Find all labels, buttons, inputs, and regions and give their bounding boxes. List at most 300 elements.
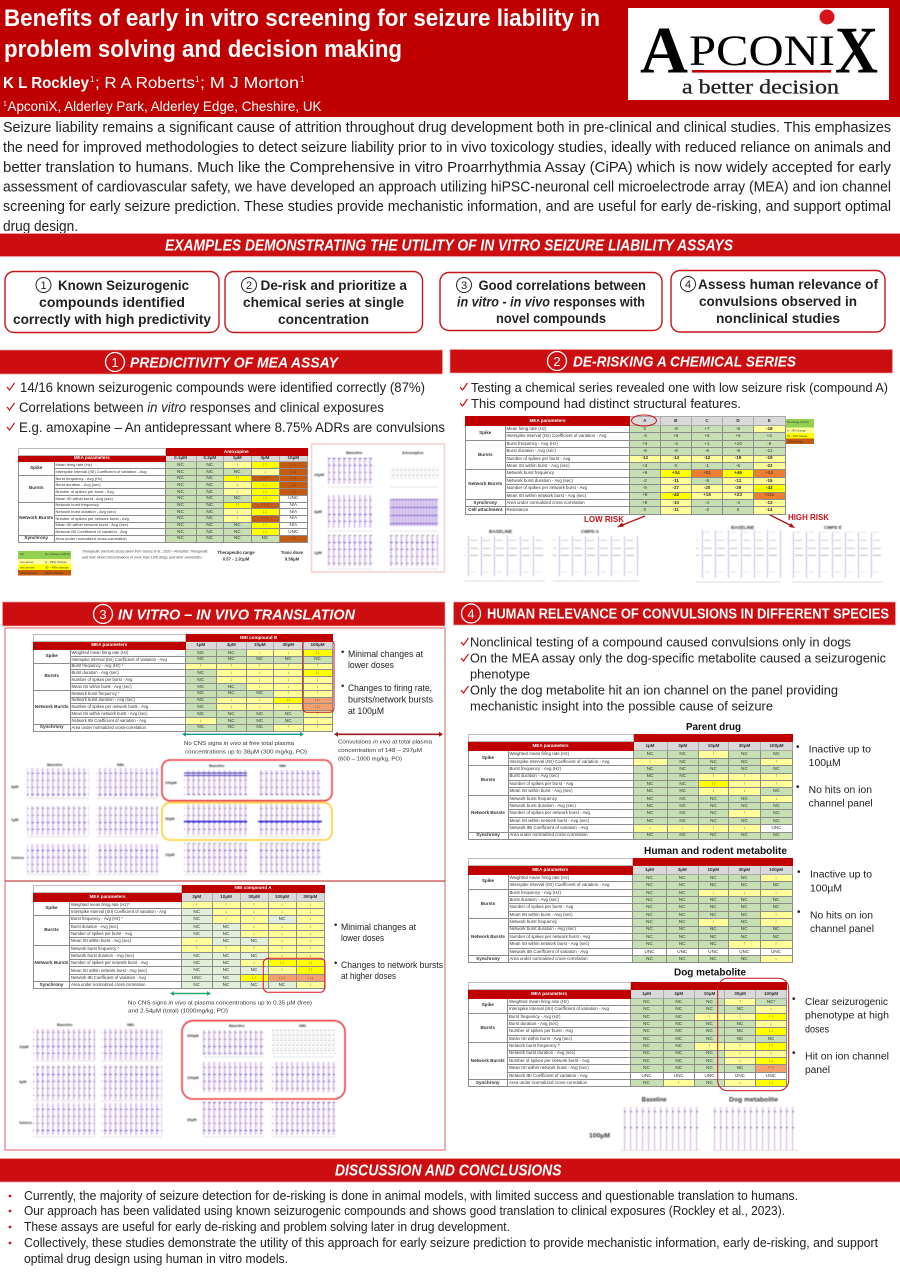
table: dog metabolite: NC: [643, 1065, 650, 1070]
table: NBI compound A: Weighted mean firing rate (Hz)*: [71, 902, 130, 907]
table: chemical series: E: [768, 418, 771, 423]
table: NBI compound A: Network burst duration - Avg (sec): [71, 953, 134, 958]
table: dog metabolite: ↓↓: [769, 1058, 773, 1063]
table: parent drug: NC: [679, 810, 686, 815]
table: NBI compound B: Interspike Interval (ISI) Coefficient of variation - Avg: [72, 657, 167, 662]
callout: dog metabolite high doses: [718, 978, 789, 1091]
raster plots: amoxapine: 1µM: [314, 550, 323, 555]
table: dog metabolite: 30µM: [734, 991, 746, 996]
table: dog metabolite: Interspike Interval (ISI) Coefficient of variation - Avg: [509, 1006, 609, 1011]
table: parent drug: Mean ISI within network burst - Avg (sec): [510, 818, 589, 823]
table: dog metabolite: ↓: [770, 1021, 772, 1026]
table: dog metabolite: ↑↑: [769, 1014, 773, 1019]
bullets: dog metabolite: •: [792, 1048, 796, 1059]
table: chemical series: B: [674, 418, 677, 423]
table: amoxapine MEA parameters: ↓↓: [263, 495, 267, 500]
table: NBI compound B: ↓↓: [315, 650, 320, 655]
raster plots: amoxapine: [312, 444, 444, 572]
table: amoxapine MEA parameters: NC: [177, 529, 184, 534]
table: NBI compound A: ↓↓: [252, 975, 256, 980]
table: NBI compound B: ↑: [316, 724, 319, 729]
table: NBI compound B: ↓↓↓: [314, 704, 321, 709]
table: human and rodent metabolite: 10µM: [707, 867, 719, 872]
table: dog metabolite: NC: [643, 1021, 650, 1026]
table: amoxapine MEA parameters: ↑↑: [235, 475, 240, 480]
table: amoxapine MEA parameters: NC: [262, 535, 268, 540]
table: amoxapine MEA parameters: 1µM: [233, 455, 242, 460]
table: chemical series: Synchrony: [473, 500, 497, 505]
table: amoxapine MEA parameters: ↑↑↑: [262, 475, 268, 480]
table: human and rodent metabolite: NC: [710, 934, 717, 939]
table: amoxapine MEA parameters: Amoxapine: [224, 449, 249, 454]
table: amoxapine MEA parameters: ↓↓: [263, 482, 267, 487]
table: human and rodent metabolite: NC: [741, 912, 748, 917]
authors: K L Rockley: [3, 75, 89, 92]
table: NBI compound A: 300µM: [303, 894, 317, 898]
table: NBI compound A: NC: [223, 967, 229, 972]
table: amoxapine MEA parameters: Interspike Interval (ISI) Coefficient of variation - Avg: [56, 469, 147, 474]
panel 4: human relevance of convulsions: [454, 602, 896, 1150]
table: dog metabolite: ↑: [739, 1043, 741, 1048]
table: parent drug: NC: [679, 818, 686, 823]
heading: discussion and conclusions: DISCUSSION AND CONCLUSIONS: [335, 1162, 562, 1180]
table: human and rodent metabolite: NC: [741, 956, 748, 961]
table: chemical series: +5: [673, 433, 678, 438]
table: parent drug: NC: [679, 796, 686, 801]
table: NBI compound A: ↓: [253, 924, 255, 929]
bullet list 1: 14/16 known seizurogenic compounds were identified correctly (87%): [20, 380, 425, 395]
table: dog metabolite: ↓: [770, 1050, 772, 1055]
table: NBI compound A: NC: [193, 967, 200, 972]
table: parent drug: Network burst duration - Avg (sec): [510, 803, 576, 808]
table: parent drug: Mean ISI within burst - Avg (sec): [510, 788, 573, 793]
table: NBI compound B: NC: [228, 724, 235, 729]
table: chemical series: +7: [704, 426, 710, 431]
table: dog metabolite: NC: [706, 1036, 713, 1041]
raster plots: dog metabolite: [589, 1098, 798, 1150]
raster plots: compound B high doses: 30µM: [165, 817, 175, 821]
table: parent drug: Area under normalized cross-correlation: [510, 832, 588, 837]
table: NBI compound A: NC: [193, 953, 200, 958]
table: amoxapine MEA parameters: 3µM: [260, 455, 270, 460]
table: chemical series: -11: [673, 507, 679, 512]
panel 2: de-risking a chemical series: [450, 350, 892, 582]
table: chemical series: -6: [767, 441, 771, 446]
table: amoxapine MEA parameters: NC: [206, 509, 213, 514]
heading 4: [454, 602, 896, 625]
table: chemical series: +9: [642, 500, 647, 505]
table: parent drug: NC: [679, 803, 686, 808]
table: chemical series: Mean ISI within network burst - Avg (sec): [506, 492, 586, 498]
therapeutic range and toxic dose: Therapeutic range: [217, 550, 255, 555]
table: NBI compound B: ↓: [230, 670, 232, 675]
table: chemical series: Burst duration - Avg (sec): [506, 448, 556, 453]
table: dog metabolite: ↓: [770, 1006, 772, 1011]
table: NBI compound B: Network IBI Coefficient of variation - Avg: [72, 718, 146, 723]
raster plots: amoxapine: Amoxapine: [402, 450, 424, 455]
table: human and rodent metabolite: ↓: [712, 919, 714, 924]
table: parent drug: 1µM: [645, 743, 655, 748]
table: NBI compound A: NC: [223, 938, 229, 943]
table: human and rodent metabolite: Network IBI Coefficient of variation - Avg: [510, 949, 588, 954]
table: NBI compound A: NC: [251, 982, 257, 987]
box 1: compounds identified: [39, 295, 185, 310]
table: dog metabolite: Network IBI Coefficient of variation - Avg: [509, 1073, 587, 1078]
table: chemical series: -12: [641, 455, 648, 460]
bullet list 4: On the MEA assay only the dog-specific metabolite caused a seizurogenic: [470, 652, 886, 666]
box 2: [225, 272, 422, 332]
table: NBI compound B: Number of spikes per burst - Avg: [72, 677, 132, 682]
table: chemical series: +5: [704, 433, 710, 438]
table: human and rodent metabolite: NC: [741, 897, 748, 902]
table: amoxapine MEA parameters: ↑↑: [235, 502, 240, 507]
table: chemical series: +6: [735, 433, 741, 438]
table: NBI compound A: Network IBI Coefficient of variation - Avg: [71, 975, 146, 980]
table: amoxapine MEA parameters: Number of spikes per burst - Avg: [56, 489, 114, 494]
table: dog metabolite: 1µM: [642, 991, 651, 996]
table: human and rodent metabolite: NC: [646, 919, 653, 924]
bullets: parent drug: channel panel: [809, 799, 873, 810]
table: human and rodent metabolite: MEA parameters: [532, 867, 568, 872]
table: NBI compound A: Bursts: [44, 927, 59, 932]
table: human and rodent metabolite: NC: [646, 897, 653, 902]
bullets: human and rodent metabolite: •: [797, 867, 801, 878]
table: human and rodent metabolite: Number of spikes per burst - Avg: [510, 904, 573, 909]
table: chemical series: -4: [643, 433, 647, 438]
table: chemical series: Bursts: [478, 452, 493, 457]
table: parent drug: NC: [647, 810, 653, 815]
table: parent drug: ↑: [743, 810, 746, 815]
note: no CNS signs compound B: No CNS signs in vivo at free total plasma: [184, 741, 295, 747]
table: NBI compound B: ↑: [316, 690, 319, 695]
table: parent drug: Number of spikes per network burst - Avg: [510, 810, 590, 815]
box 2: De-risk and prioritize a: [260, 278, 407, 293]
table: human and rodent metabolite: NC: [773, 934, 779, 939]
table: NBI compound B: ↓↓↓: [314, 697, 321, 702]
raster plots: compound A low doses: Vehicle: [19, 1121, 32, 1125]
table: dog metabolite: 100µM: [764, 991, 778, 996]
table: NBI compound A: ↑: [225, 902, 227, 907]
table: chemical series: -10: [672, 500, 679, 505]
table: chemical series: +23: [734, 492, 742, 497]
bullet list 2: This compound had distinct structural features.: [471, 396, 741, 411]
table: dog metabolite: UNC: [642, 1073, 651, 1078]
table: NBI compound A: ↑: [196, 902, 198, 907]
table: amoxapine MEA parameters: N/A: [289, 509, 297, 514]
bullets: compound B: Changes to firing rate,: [348, 683, 432, 694]
table: chemical series: Mean firing rate (Hz): [506, 426, 547, 431]
table: NBI compound B: Weighted mean firing rate (Hz): [72, 650, 128, 655]
table: NBI compound A: Synchrony: [40, 982, 63, 987]
table: human and rodent metabolite: NC: [710, 926, 717, 931]
table: amoxapine MEA parameters: NC: [206, 529, 213, 534]
table: parent drug: Bursts: [481, 777, 495, 782]
table: amoxapine MEA parameters: NC: [206, 475, 213, 480]
heading 3: IN VITRO – IN VIVO TRANSLATION: [118, 606, 356, 624]
table: human and rodent metabolite: NC: [710, 897, 717, 902]
heading: dog metabolite: Dog metabolite: [674, 967, 747, 978]
table: NBI compound B: ↑: [200, 663, 202, 668]
label: low risk with arrow: [584, 514, 645, 528]
table: chemical series: +4: [767, 433, 772, 438]
callout: high dose network bursts: [263, 958, 325, 992]
legend: chemical series: No change (±20%): [787, 420, 809, 424]
bullet list 4: phenotype: [470, 668, 530, 682]
bullets: compound A: [334, 920, 443, 982]
conclusions list: Currently, the majority of seizure detection for de-risking is done in animal models, with limited success and questionable translation to humans.: [24, 1188, 798, 1203]
table: NBI compound A: ↓: [309, 931, 311, 936]
raster plots: compound A and E: BASELINE: [489, 529, 512, 534]
table: human and rodent metabolite: Network burst duration - Avg (sec): [510, 926, 576, 931]
table: parent drug: NC: [741, 818, 748, 823]
box 2: concentration: [278, 312, 369, 327]
table: amoxapine MEA parameters: NC: [177, 495, 184, 500]
table: human and rodent metabolite: NC: [679, 926, 686, 931]
table: chemical series: -2: [643, 478, 647, 483]
table: human and rodent metabolite: NC: [710, 941, 717, 946]
table: dog metabolite: Area under normalized cross-correlation: [509, 1080, 587, 1085]
table: dog metabolite: Mean ISI within burst - Avg (sec): [509, 1036, 572, 1041]
table: NBI compound B: NC: [197, 684, 204, 689]
bullets: parent drug: Inactive up to: [809, 745, 871, 756]
table: NBI compound A: UNC: [192, 975, 202, 980]
box 3: in vitro - in vivo responses with: [457, 294, 645, 310]
table: amoxapine MEA parameters: ↑↑↑: [262, 502, 268, 507]
raster plots: compound A low doses: Baseline: [57, 1023, 73, 1027]
table: human and rodent metabolite: Interspike Interval (ISI) Coefficient of variation - Avg: [510, 882, 609, 887]
bullets: compound A: at higher doses: [341, 971, 396, 982]
table: parent drug: Network Bursts: [471, 810, 505, 815]
table: parent drug: Weighted mean firing rate (Hz): [510, 751, 569, 756]
heading 3: 3: [99, 607, 107, 622]
table: chemical series: -6: [736, 463, 740, 468]
bullets: human and rodent metabolite: 100µM: [810, 883, 842, 894]
table: NBI compound A: ↓: [309, 945, 311, 950]
table: amoxapine MEA parameters: ↓↓↓: [262, 515, 268, 520]
table: human and rodent metabolite: ↑: [743, 941, 745, 946]
introduction text: the need for improved methodologies to detect seizure liability prior to in vivo toxicology studies, ideally with reduced reliance on animals and: [3, 140, 891, 156]
note: therapeutic and toxic doses: Therapeutic and toxic doses taken from Schulz et al., 2020 – Revisited: Therapeutic: [82, 550, 208, 554]
table: NBI compound A: ↓: [253, 909, 255, 914]
table: NBI compound A: ↓: [281, 931, 283, 936]
table: dog metabolite: Number of spikes per network burst - Avg: [509, 1058, 589, 1063]
bullets: human and rodent metabolite: •: [797, 907, 801, 918]
table: dog metabolite: NC: [706, 1065, 713, 1070]
table: parent drug: ↓: [775, 796, 778, 801]
legend: amoxapine table: one arrow: [20, 560, 34, 564]
bullets: parent drug: •: [796, 782, 800, 793]
raster plots: dog metabolite: Dog metabolite: [729, 1098, 779, 1104]
table: human and rodent metabolite: NC: [646, 904, 653, 909]
table: amoxapine MEA parameters: NC: [234, 469, 241, 474]
table: chemical series: -9: [643, 485, 647, 490]
table: human and rodent metabolite: ↓: [775, 875, 777, 880]
conclusions list: Collectively, these studies demonstrate the utility of this approach for early seizure prediction to provide mechanistic information, early de-risking, and support: [24, 1235, 878, 1250]
table: chemical series: +3: [642, 441, 647, 446]
raster plots: compound A low doses: 10µM: [19, 1045, 29, 1049]
table: parent drug: ↓: [712, 788, 715, 793]
table: NBI compound A: NC: [193, 924, 200, 929]
table: parent drug: 30µM: [739, 743, 750, 748]
raster plots: compound A high doses: NBI-: [299, 1024, 308, 1028]
table: parent drug: NC: [647, 751, 653, 756]
table: NBI compound B: NC: [197, 677, 204, 682]
bullets: dog metabolite: [792, 994, 889, 1076]
table: human and rodent metabolite: NC: [679, 882, 686, 887]
table: dog metabolite: NC: [737, 1028, 743, 1033]
table: human and rodent metabolite: 1µM: [645, 867, 654, 872]
table: NBI compound B: NC: [228, 690, 235, 695]
table: human and rodent metabolite: UNC: [708, 949, 718, 954]
table: chemical series: -29: [735, 485, 741, 490]
authors: 1: [300, 75, 305, 84]
table: parent drug: NC: [773, 788, 780, 793]
box 1: correctly with high predictivity: [13, 312, 211, 327]
table: dog metabolite: NC*: [767, 999, 775, 1004]
table: NBI compound A: ↑: [196, 945, 198, 950]
table: NBI compound B: Synchrony: [40, 724, 64, 729]
box 1: 1: [40, 280, 47, 292]
table: dog metabolite: Number of spikes per burst - Avg: [509, 1028, 573, 1033]
table: parent drug: ↑: [775, 759, 778, 764]
table: parent drug: NC: [679, 759, 686, 764]
table: parent drug: NC: [710, 796, 717, 801]
note: no CNS signs compound B: concentrations up to 38µM (300 mg/kg, PO): [185, 750, 307, 756]
note: no CNS signs compound A: and 2.54µM (total) (1000mg/kg, PO): [128, 1008, 228, 1014]
table: NBI compound A: ↓: [253, 960, 255, 965]
table: NBI compound B: NC: [285, 718, 292, 723]
table: human and rodent metabolite: Burst frequency - Avg (Hz): [510, 890, 561, 895]
table: amoxapine MEA parameters: N/A: [289, 515, 297, 520]
table: parent drug: NC: [679, 773, 686, 778]
raster plots: compound B high doses: Baseline: [209, 764, 225, 768]
note: therapeutic and toxic doses: [82, 550, 208, 560]
table: NBI compound A: 3µM: [192, 894, 201, 898]
table: human and rodent metabolite: UNC: [739, 949, 749, 954]
table: human and rodent metabolite: NC: [710, 912, 717, 917]
table: NBI compound B: ↓: [259, 650, 261, 655]
table: chemical series: -42: [672, 492, 679, 497]
box 3: Good correlations between: [478, 278, 646, 293]
table: chemical series: +9: [642, 470, 647, 475]
table: human and rodent metabolite: NC: [710, 882, 717, 887]
table: NBI compound A: NBI compound A: [234, 885, 272, 890]
table: chemical series: Number of spikes per burst - Avg: [506, 456, 570, 461]
table: NBI compound B: ↓: [287, 677, 289, 682]
label: high risk with arrow: [770, 512, 830, 528]
table: NBI compound A: ↓↓: [308, 960, 313, 965]
table: NBI compound A: NC: [223, 953, 229, 958]
table: amoxapine MEA parameters: Burst duration - Avg (sec): [56, 482, 101, 487]
table: human and rodent metabolite: Number of spikes per network burst - Avg: [510, 934, 590, 939]
callout: 30µM plots: [162, 803, 332, 840]
table: dog metabolite: NC: [675, 1028, 682, 1033]
table: dog metabolite: Burst duration - Avg (sec): [509, 1021, 558, 1026]
box 4: Assess human relevance of: [698, 277, 879, 292]
table: parent drug: NC: [741, 803, 748, 808]
table: NBI compound B: NC: [228, 684, 235, 689]
table: human and rodent metabolite: NC: [646, 934, 653, 939]
table: human and rodent metabolite: Mean ISI within burst - Avg (sec): [510, 912, 573, 917]
box 4: [671, 270, 885, 332]
table: amoxapine MEA parameters: NC: [206, 482, 213, 487]
table: NBI compound B: NBI compound B: [240, 635, 277, 640]
table: parent drug: NC: [647, 773, 653, 778]
table: amoxapine MEA parameters: ↓↓↓: [290, 475, 297, 480]
raster plots: compound A and E: CMPD A: [581, 529, 600, 534]
table: parent drug: NC: [710, 759, 717, 764]
table: dog metabolite: MEA parameters: [531, 991, 567, 996]
table: chemical series: -15: [766, 478, 773, 483]
table: parent drug: Spike: [482, 755, 494, 760]
bullets: human and rodent metabolite: [797, 867, 874, 935]
legend: chemical series: ≥50% change: [787, 440, 803, 444]
bullets: dog metabolite: phenotype at high: [805, 1011, 889, 1022]
table: parent drug: ↓: [743, 788, 746, 793]
table: dog metabolite: Network burst duration - Avg (sec): [509, 1050, 575, 1055]
arrow: no CNS signs compound A: [170, 991, 211, 996]
table: chemical series: -12: [735, 478, 741, 483]
table: NBI compound B: Network burst duration - Avg (sec): [72, 697, 135, 702]
table: chemical series: 0: [643, 507, 646, 512]
box 1: [5, 272, 219, 332]
table: human and rodent metabolite: ↓: [775, 919, 777, 924]
table: human and rodent metabolite: Network burst frequency: [510, 919, 557, 924]
table: NBI compound B: Burst duration - Avg (sec): [72, 670, 119, 675]
table: dog metabolite: NC: [643, 1028, 650, 1033]
table: NBI compound B: ↓: [200, 718, 202, 723]
table: dog metabolite: NC: [706, 1080, 713, 1085]
table: human and rodent metabolite: NC: [646, 882, 653, 887]
table: parent drug: NC: [647, 803, 653, 808]
table: dog metabolite: NC: [675, 1065, 682, 1070]
table: amoxapine MEA parameters: Network burst frequency: [56, 502, 99, 507]
note: no CNS signs compound A: No CNS signs in vivo at plasma concentrations up to 0.35 µM (free): [128, 1000, 312, 1006]
table: parent drug: ↑: [649, 759, 651, 764]
table: NBI compound A: ↑: [253, 902, 255, 907]
table: NBI compound B: ↓: [259, 684, 261, 689]
table: chemical series: -4: [705, 500, 709, 505]
legend: chemical series: 30 – 49% change: [787, 434, 808, 438]
table: parent drug: NC: [741, 751, 748, 756]
arrow: convulsions range: [334, 732, 443, 737]
table: NBI compound B: ↓: [259, 704, 261, 709]
table: NBI compound A: NC: [251, 953, 257, 958]
table: dog metabolite: ↓: [739, 1058, 741, 1063]
table: chemical series: Interspike Interval (ISI) Coefficient of variation - Avg: [506, 433, 606, 438]
bullets: dog metabolite: panel: [805, 1065, 830, 1076]
table: NBI compound A: ↓: [281, 953, 283, 958]
legend: amoxapine table: NC: [20, 552, 25, 556]
table: amoxapine MEA parameters: ↓↓: [263, 509, 267, 514]
table: dog metabolite: Spike: [482, 1002, 494, 1007]
table: NBI compound A: ↓: [281, 924, 283, 929]
table: chemical series: +10: [734, 441, 742, 446]
table: amoxapine MEA parameters: ↓: [236, 509, 238, 514]
table: dog metabolite: ↑: [678, 1080, 680, 1085]
table: dog metabolite: NC: [706, 1021, 713, 1026]
raster plots: compound A low doses: NBI-: [127, 1023, 136, 1027]
table: human and rodent metabolite: Burst duration - Avg (sec): [510, 897, 559, 902]
bullets: parent drug: •: [796, 742, 800, 753]
table: human and rodent metabolite: NC: [679, 941, 686, 946]
table: amoxapine MEA parameters: Bursts: [29, 485, 44, 490]
title: [4, 5, 600, 63]
table: NBI compound B: NC: [197, 650, 204, 655]
frame: translation panel: [5, 628, 445, 1150]
raster plots: amoxapine: 3µM: [314, 509, 323, 514]
table: chemical series: +46: [734, 470, 742, 475]
